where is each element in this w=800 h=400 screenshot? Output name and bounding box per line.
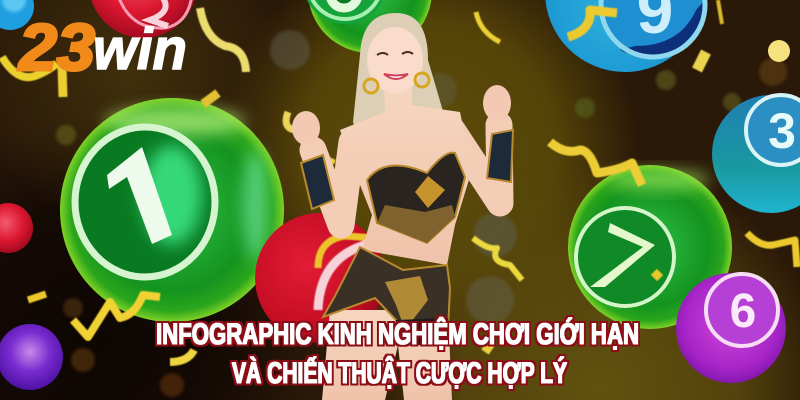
legs — [322, 310, 452, 400]
ball: blue number 3: 3 — [768, 103, 796, 159]
title line 2: VÀ CHIẾN THUẬT CƯỢC HỢP LÝ — [232, 356, 567, 390]
fists — [292, 111, 320, 145]
ball: purple number 6 — [676, 273, 786, 383]
ball: blue number 3 — [712, 95, 800, 213]
ball: green number 7 — [568, 165, 732, 329]
figure: smiling woman in gold costume — [292, 13, 513, 400]
logo: 23win: win — [93, 17, 187, 82]
ball: green number 1 — [60, 98, 284, 322]
logo: 23win — [17, 10, 187, 84]
title line 1: INFOGRAPHIC KINH NGHIỆM CHƠI GIỚI HẠN — [156, 317, 639, 351]
earrings — [364, 79, 378, 93]
ball: green number 6 top — [303, 0, 432, 53]
ball: red left — [0, 203, 33, 253]
neck and torso — [340, 85, 472, 265]
ball: purple number 6: 6 — [730, 285, 756, 338]
ball: red behind figure — [255, 213, 385, 343]
title — [156, 317, 639, 390]
logo: 23win: 23 — [17, 10, 95, 84]
bodice — [367, 153, 465, 243]
ball: blue top left — [0, 0, 34, 30]
wrist cuffs — [301, 155, 334, 209]
face — [367, 27, 423, 93]
hair — [353, 13, 445, 170]
ball: yellow small — [768, 40, 790, 62]
skirt — [323, 247, 450, 330]
ball: purple bottom left — [0, 324, 63, 390]
ball: blue number 9 — [545, 0, 705, 72]
arms — [313, 125, 500, 225]
ball: red top — [89, 0, 197, 38]
